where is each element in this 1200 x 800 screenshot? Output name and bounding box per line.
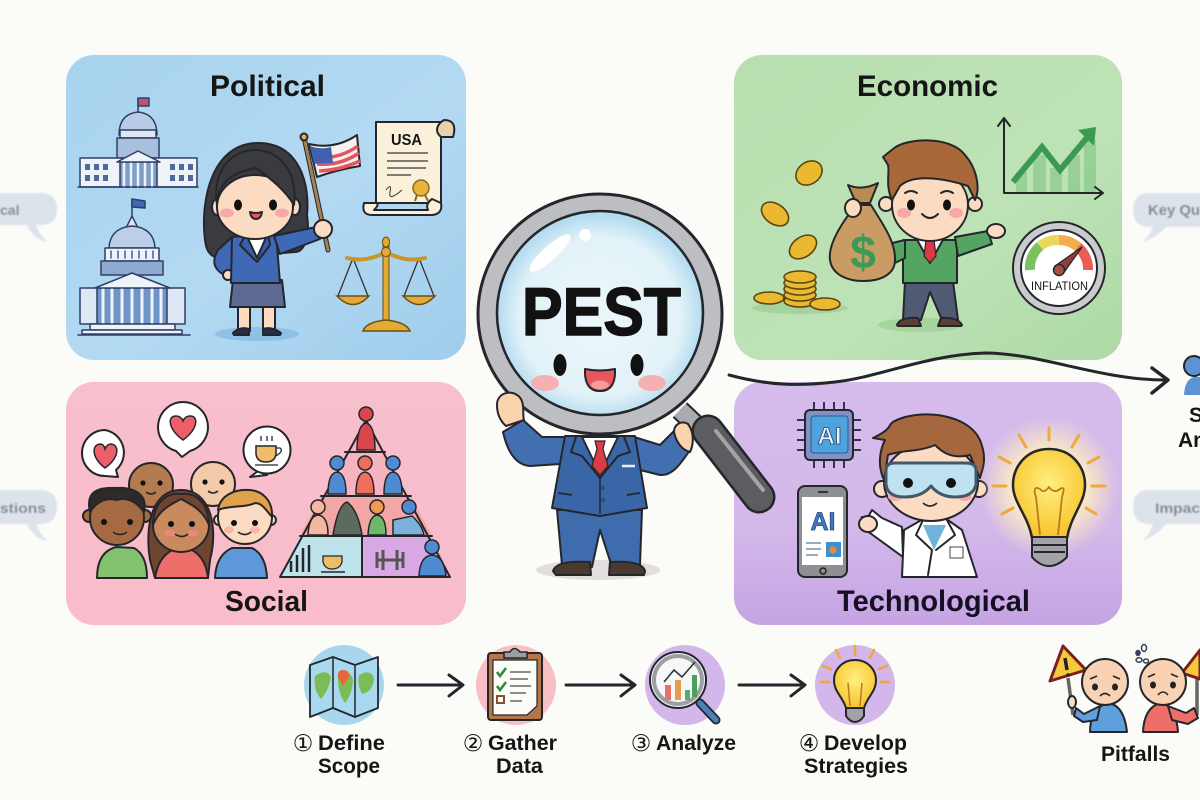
step 2: gather data: Data (496, 755, 543, 778)
pitfalls group (1050, 644, 1200, 766)
icon: constitution scroll (363, 120, 454, 215)
heading: social: Social (225, 586, 308, 618)
step 1: define scope: Scope (318, 755, 380, 778)
step 4: develop strategies: Strategies (804, 755, 908, 778)
icon: light bulb (979, 417, 1119, 566)
chart: rising line (998, 118, 1103, 199)
character: economist (878, 140, 1005, 332)
arrow: curved flow to analysis (729, 353, 1168, 393)
icon: inflation gauge (1013, 222, 1105, 314)
panel: political (66, 55, 466, 360)
icon: worried person with warning sign right (1140, 650, 1200, 732)
group of people (83, 462, 276, 578)
icon: worry drops (1136, 644, 1148, 663)
icon: money bag (830, 183, 895, 281)
callout: top right (1133, 193, 1200, 242)
icon: worried person with warning sign left (1050, 646, 1128, 732)
step 2: gather data (463, 645, 557, 778)
character: politician with flag (204, 134, 360, 341)
step 3: analyze (631, 645, 736, 757)
step 4: develop strategies: ④ (799, 731, 819, 757)
step 3: analyze: ③ (631, 731, 651, 757)
arrow: step 1 to 2 (398, 675, 463, 696)
callout: top right: Key Qu (1148, 202, 1200, 219)
icon: capitol building bottom (78, 199, 190, 335)
magnifier handle (680, 410, 763, 497)
panel: economic (734, 55, 1122, 360)
icon: person at right edge (1184, 356, 1200, 395)
step 1: define scope (293, 645, 385, 778)
arrow: step 2 to 3 (566, 675, 635, 696)
icon: smartphone: AI (810, 508, 836, 536)
step 4: develop strategies (799, 645, 908, 778)
callout: bottom left (0, 490, 57, 541)
icon: scales of justice (337, 237, 435, 331)
icon: coins (752, 156, 848, 314)
arrow: step 3 to 4 (739, 675, 805, 696)
step 3: analyze: Analyze (656, 732, 736, 755)
callout: top left (0, 193, 57, 242)
icon: smartphone (798, 486, 847, 577)
icon: AI chip: AI (818, 423, 842, 450)
icon: capitol building top (78, 98, 198, 187)
panel: technological (734, 382, 1122, 625)
character: scientist (859, 415, 987, 577)
process flow (293, 645, 908, 778)
icon: AI chip (797, 402, 861, 468)
heading: technological: Technological (837, 585, 1030, 618)
callout: top left: cal (0, 202, 19, 218)
icon: speech bubbles (82, 402, 290, 477)
icon: money bag: $ (850, 226, 876, 278)
icon: inflation gauge: INFLATION (1031, 281, 1088, 293)
step 4: develop strategies: Develop (824, 732, 907, 755)
step 1: define scope: Define (318, 732, 385, 755)
heading: economic: Economic (857, 70, 998, 103)
label: right edge text (1178, 404, 1200, 452)
label: pitfalls: Pitfalls (1101, 743, 1170, 766)
heading: political: Political (210, 70, 325, 103)
central character: PEST magnifying glass mascot (478, 194, 763, 580)
magnifier lens (478, 194, 722, 434)
step 2: gather data: ② (463, 731, 483, 757)
hands (497, 393, 693, 452)
step 2: gather data: Gather (488, 732, 557, 755)
title: PEST: PEST (522, 274, 681, 350)
suit body (503, 420, 690, 575)
callout: bottom right (1133, 490, 1200, 541)
chart: social pyramid (280, 407, 450, 577)
step 1: define scope: ① (293, 731, 313, 757)
panel: social (66, 382, 466, 625)
callout: bottom left: stions (0, 500, 46, 516)
callout: bottom right: Impac (1155, 500, 1200, 516)
icon: constitution scroll: USA (391, 132, 422, 149)
